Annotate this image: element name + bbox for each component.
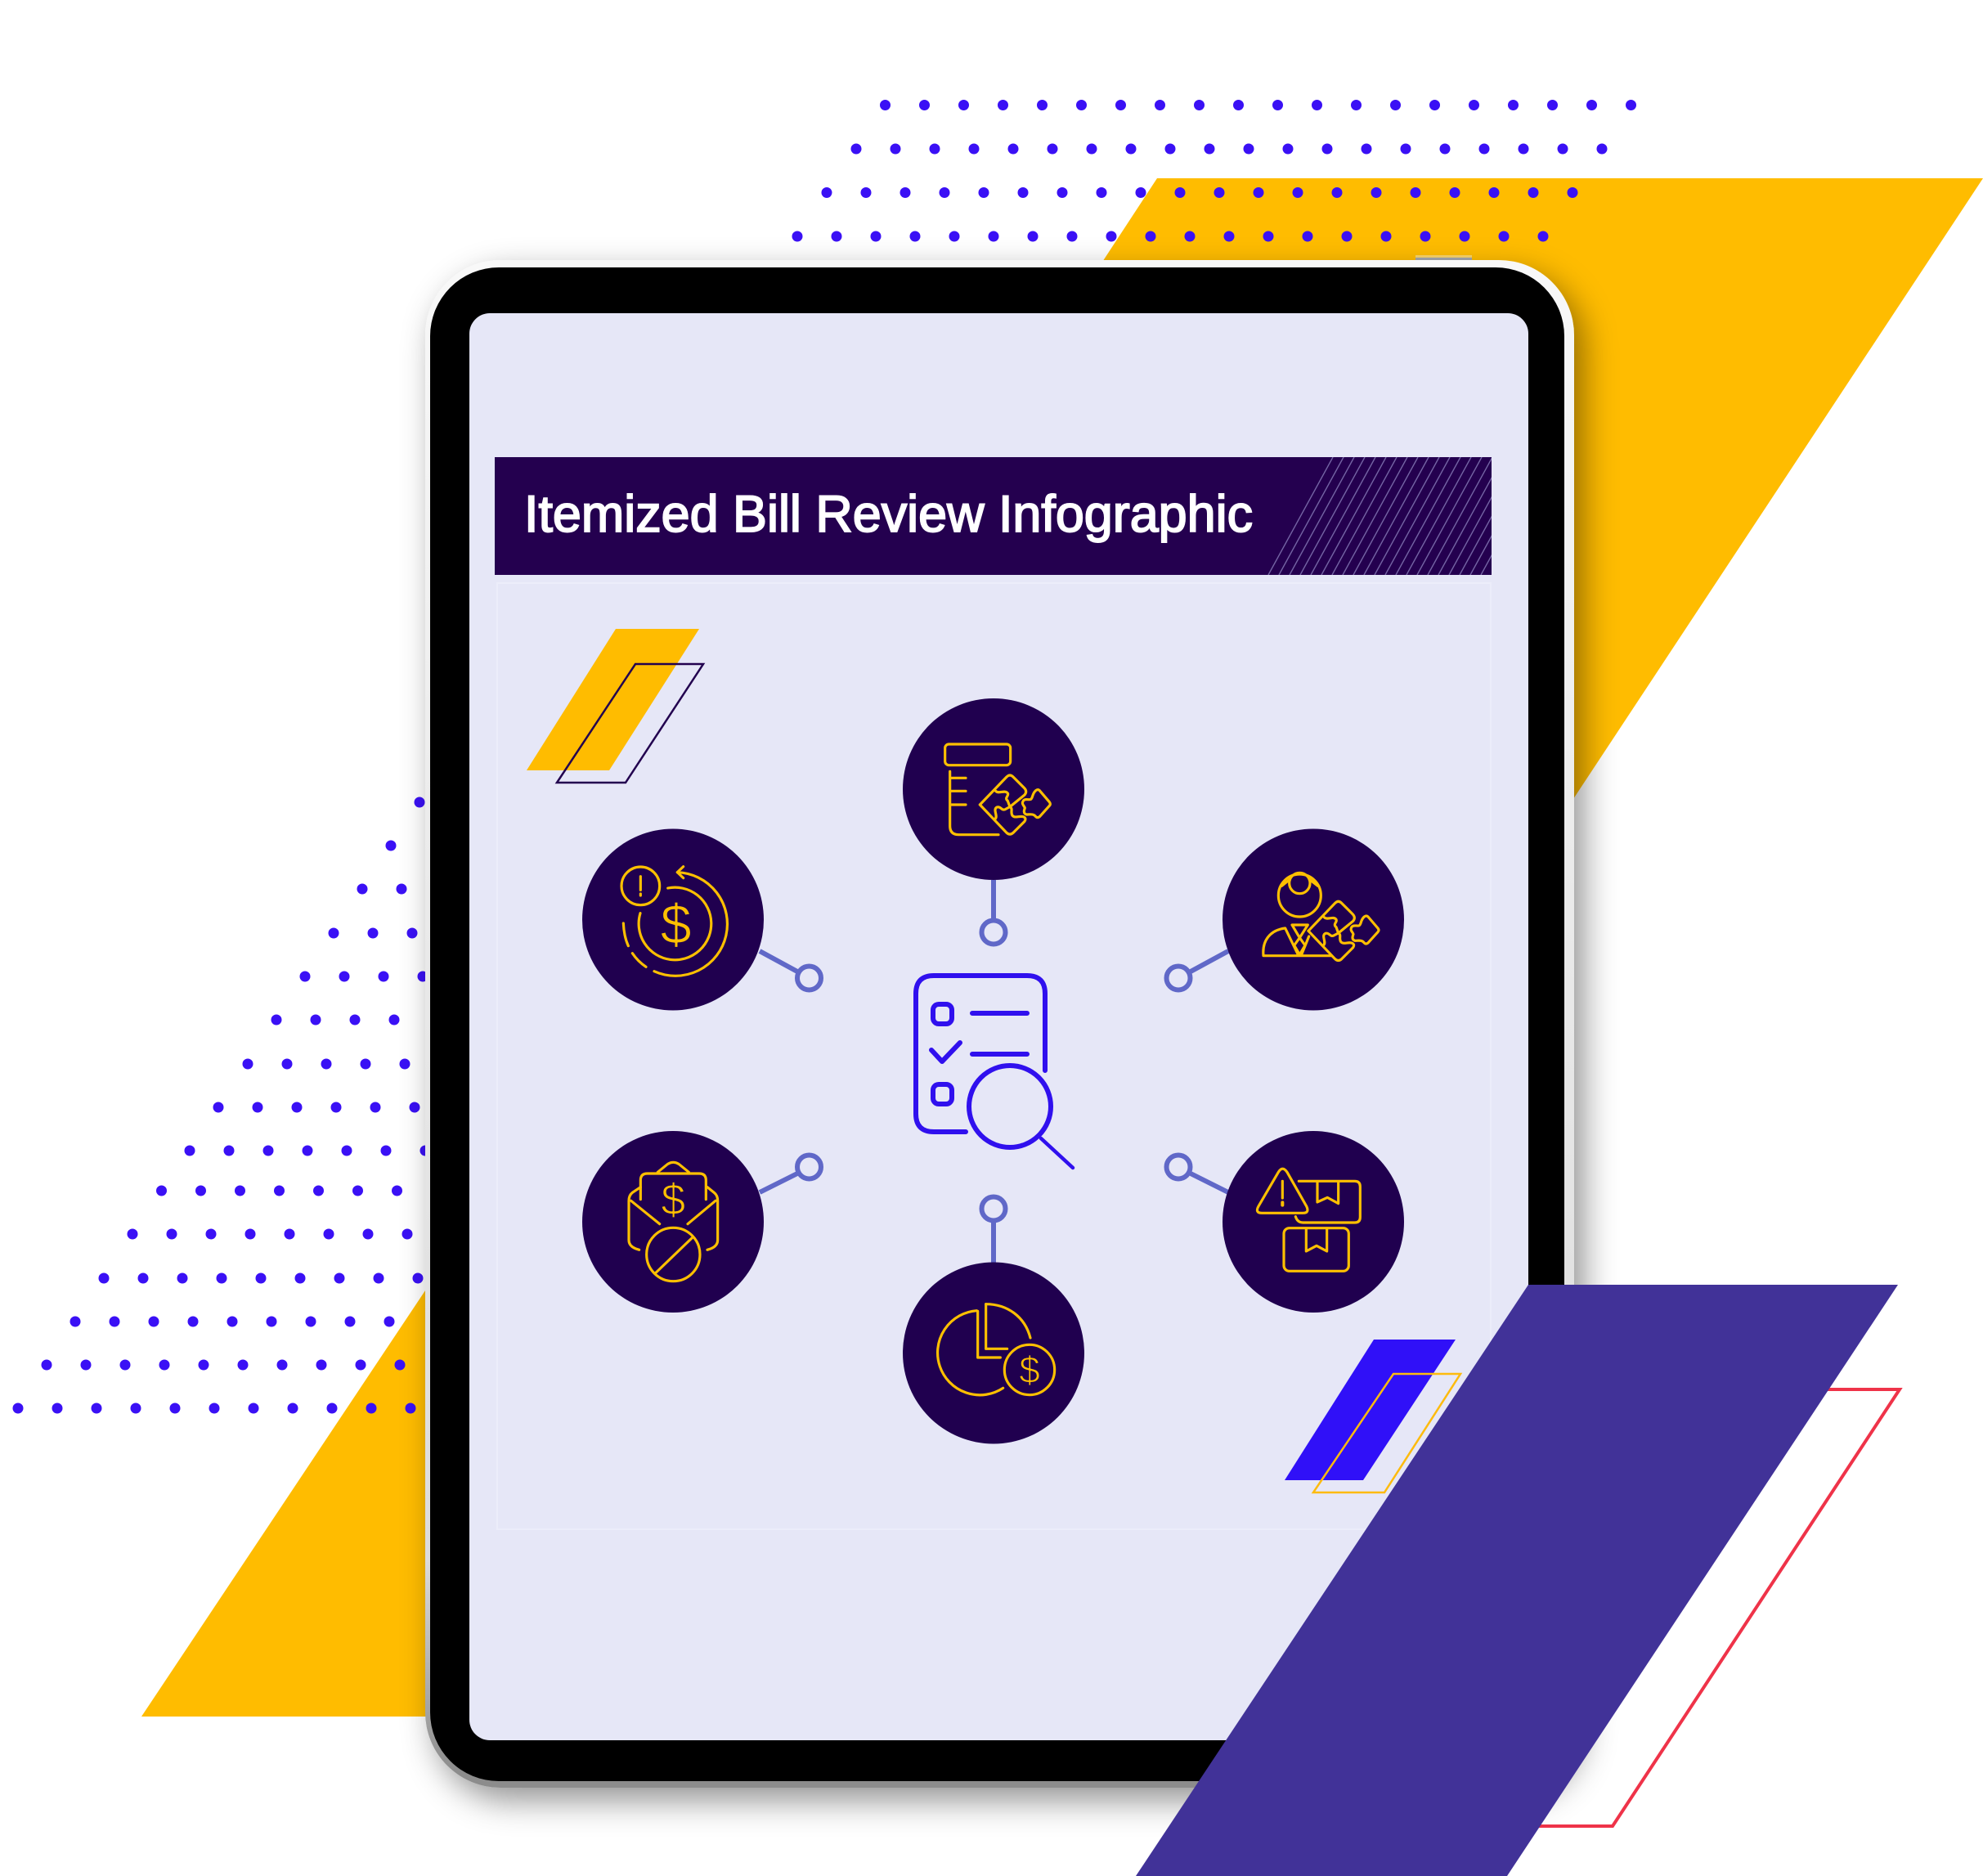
node: recurring dollar with alert: [582, 829, 764, 1011]
purple parallelogram: foreground: [1136, 1285, 1898, 1876]
connector: upper right: [1166, 951, 1228, 990]
node: envelope with blocked payment: $: [661, 1176, 685, 1224]
node: pie chart and coin: [903, 1263, 1084, 1444]
tablet device: [425, 255, 1574, 1788]
red outline parallelogram: [1521, 1389, 1900, 1826]
node: recurring dollar with alert: $: [661, 894, 692, 956]
node: pie chart and coin: $: [1019, 1349, 1040, 1391]
connector: bottom: [981, 1197, 1006, 1263]
connector: top: [981, 880, 1006, 944]
node: envelope with blocked payment: [582, 1131, 764, 1313]
connector: lower right: [1166, 1155, 1228, 1192]
node: person and puzzle: [1223, 829, 1404, 1011]
node: jar and puzzle: [903, 698, 1084, 880]
title text: Itemized Bill Review Infographic: [524, 486, 1253, 543]
dot field: left: [18, 802, 433, 1408]
dot field: top: [797, 105, 1632, 236]
central icon: checklist with magnifier: [916, 976, 1073, 1168]
yellow parallelogram: top right: [749, 178, 1983, 801]
accent: blue parallelogram with outline: [1285, 1340, 1460, 1492]
node: warning and packages: [1223, 1131, 1404, 1313]
connector: upper left: [760, 951, 821, 990]
connector: lower left: [760, 1155, 821, 1192]
title banner: [495, 457, 1546, 575]
accent: yellow parallelogram with outline: [527, 629, 703, 783]
body panel outline: [497, 583, 1491, 1529]
yellow triangle: bottom left: [141, 1241, 458, 1717]
